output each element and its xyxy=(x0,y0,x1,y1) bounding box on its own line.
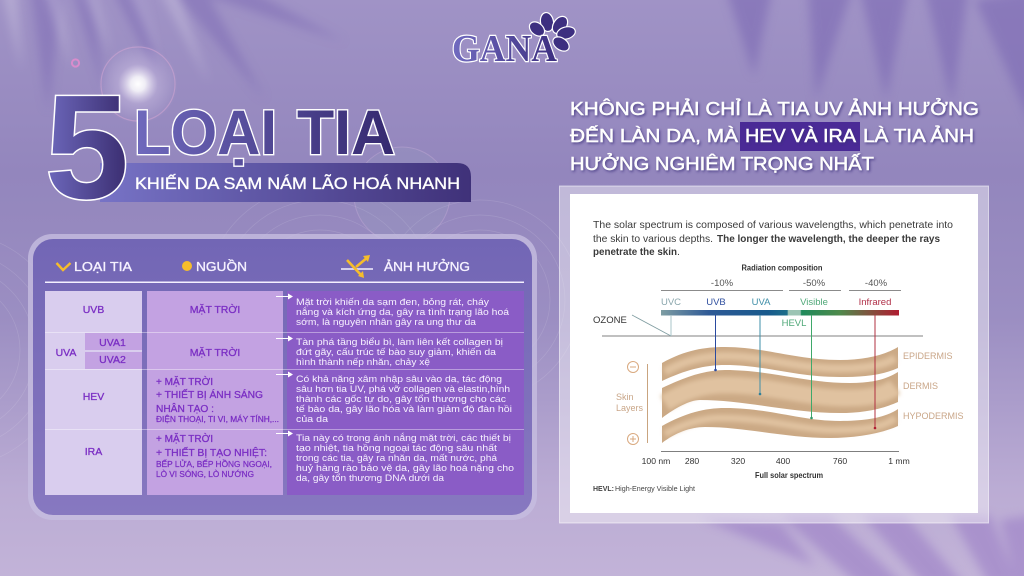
wavelength axis: 280 xyxy=(685,456,699,466)
spectrum bands: UVB xyxy=(706,297,726,308)
skin layers: EPIDERMIS xyxy=(903,351,953,361)
skin layers: DERMIS xyxy=(903,381,938,391)
icon: ray reflecting xyxy=(341,255,373,278)
spectrum bands: UVA xyxy=(752,297,771,308)
heading: right column: KHÔNG PHẢI CHỈ LÀ TIA UV ẢNH HƯỞNG xyxy=(570,98,979,119)
table header xyxy=(45,255,524,283)
column: effects: trong các tia, gây ra nhăn da, mất nước, phá xyxy=(296,453,497,463)
column: effects: Tia này có trong ánh nắng mặt trời, các thiết bị xyxy=(296,433,511,443)
column: effects: sâu hơn tia UV, phá vỡ collagen và elastin,hình xyxy=(296,384,510,394)
subtitle banner: KHIẾN DA SẠM NÁM LÃO HOÁ NHANH xyxy=(135,174,460,193)
column: sources: MẶT TRỜI xyxy=(190,303,240,316)
column: sources: LÒ VI SÓNG, LÒ NƯỚNG xyxy=(156,470,254,479)
spectrum bands: HEVL xyxy=(782,318,806,329)
heading: LOẠI TIA: TIA xyxy=(297,98,395,168)
column: ray types: HEV xyxy=(83,391,104,403)
wavelength axis: 760 xyxy=(833,456,847,466)
column: effects: tạo nhiệt, tia hồng ngoại tác động sâu nhất xyxy=(296,443,498,453)
icon: flower xyxy=(527,12,577,54)
radiation composition: -10% xyxy=(711,278,734,289)
skin depth scale: Skin xyxy=(616,392,634,402)
logo wordmark: GANA xyxy=(452,28,558,70)
row arrows xyxy=(276,294,293,436)
column: sources xyxy=(147,291,283,495)
panel: ray table xyxy=(28,234,537,520)
panel: solar spectrum diagram xyxy=(560,186,988,523)
heading: LOẠI TIA: LOẠI xyxy=(134,98,277,168)
column: effects: nắng và kích ứng da, gây ra tình trạng lão hoá xyxy=(296,307,509,317)
icon: check xyxy=(56,263,70,270)
column: ray types: UVA xyxy=(56,347,76,359)
wavelength axis: 1 mm xyxy=(888,456,910,466)
penetration lines xyxy=(714,315,876,429)
spectrum bands xyxy=(661,297,899,329)
column: ray types: IRA xyxy=(85,446,102,458)
intro text: the skin to various depths. xyxy=(593,233,713,245)
spectrum bands: Infrared xyxy=(859,297,891,308)
heading: LOẠI TIA xyxy=(134,98,395,168)
wavelength axis: Full solar spectrum xyxy=(755,471,823,480)
column: sources: + THIẾT BỊ TẠO NHIỆT: xyxy=(156,446,267,459)
heading: right column: HEV VÀ IRA xyxy=(745,125,857,146)
intro text: The longer the wavelength, the deeper the rays xyxy=(717,233,940,245)
radiation composition xyxy=(661,264,901,290)
column: effects: sớm, là nguyên nhân gây ra ung thư da xyxy=(296,317,476,327)
column: effects xyxy=(287,291,524,495)
highlight xyxy=(740,122,860,151)
table header: NGUỒN xyxy=(196,259,247,274)
table header: ẢNH HƯỞNG xyxy=(384,259,470,274)
skin depth scale xyxy=(616,362,648,444)
intro text: penetrate the skin xyxy=(593,246,677,258)
column: sources: NHÂN TẠO : xyxy=(156,402,214,415)
column: ray types: UVA1 xyxy=(99,337,126,349)
table header: LOẠI TIA xyxy=(74,259,132,274)
wavelength axis xyxy=(642,452,910,480)
column: sources: + MẶT TRỜI xyxy=(156,375,213,388)
column: ray types: UVB xyxy=(83,304,104,316)
radiation composition: Radiation composition xyxy=(742,264,823,272)
intro text: . xyxy=(677,246,680,258)
footnote: High-Energy Visible Light xyxy=(615,484,695,493)
spectrum bands: UVC xyxy=(661,297,681,308)
subtitle banner xyxy=(100,163,471,202)
intro text: The solar spectrum is composed of various wavelengths, which penetrate into xyxy=(593,219,953,231)
column: effects: Tàn phá tầng biểu bì, làm liên kết collagen bị xyxy=(296,337,503,347)
skin depth scale: Layers xyxy=(616,403,644,413)
column: effects: da, gây tổn thương DNA dưới da xyxy=(296,473,444,483)
skin layers xyxy=(662,347,964,443)
intro text xyxy=(593,219,953,258)
heading: right column: HƯỞNG NGHIÊM TRỌNG NHẤT xyxy=(570,153,874,174)
column: ray types: UVA2 xyxy=(99,354,126,366)
radiation composition: -50% xyxy=(803,278,826,289)
column: effects: đứt gãy, cấu trúc tế bào suy giảm, khiến da xyxy=(296,347,496,357)
column: sources: MẶT TRỜI xyxy=(190,346,240,359)
skin layers: HYPODERMIS xyxy=(903,411,964,421)
footnote: HEVL: xyxy=(593,484,614,493)
radiation composition: -40% xyxy=(865,278,888,289)
column: sources: + MẶT TRỜI xyxy=(156,432,213,445)
column: effects: huỷ hàng rào bảo vệ da, gây lão hoá nặng cho xyxy=(296,463,514,473)
heading: right column: LÀ TIA ẢNH xyxy=(863,125,974,146)
column: effects: tế bào da, gây lão hóa và làm giảm độ đàn hồi xyxy=(296,404,512,414)
ozone line: OZONE xyxy=(593,315,627,326)
wavelength axis: 400 xyxy=(776,456,790,466)
column: effects: Có khả năng xâm nhập sâu vào da, tác động xyxy=(296,374,502,384)
column: effects: hình thành nếp nhăn, chảy xệ xyxy=(296,357,430,367)
heading: right column: ĐẾN LÀN DA, MÀ xyxy=(570,125,739,146)
column: sources: + THIẾT BỊ ÁNH SÁNG xyxy=(156,388,263,401)
heading: right column xyxy=(570,98,979,174)
spectrum bands: Visible xyxy=(800,297,828,308)
column: sources: ĐIỆN THOẠI, TI VI, MÁY TÍNH,... xyxy=(156,415,279,424)
title: 5 loại tia xyxy=(45,65,471,230)
wavelength axis: 100 nm xyxy=(642,456,670,466)
column: effects: của da xyxy=(296,414,328,424)
column: effects: Mặt trời khiến da sạm đen, bỏng rát, cháy xyxy=(296,297,490,307)
wavelength axis: 320 xyxy=(731,456,745,466)
column: ray types xyxy=(45,291,142,495)
logo: GANA xyxy=(452,12,577,70)
ozone line xyxy=(593,315,923,336)
column: sources: BẾP LỬA, BẾP HỒNG NGOẠI, xyxy=(156,459,272,469)
big number 5: 5 xyxy=(45,65,129,230)
column: effects: thành các gốc tự do, gây tổn thương cho các xyxy=(296,394,507,404)
sun flare xyxy=(72,44,450,243)
icon: sun xyxy=(182,261,192,271)
